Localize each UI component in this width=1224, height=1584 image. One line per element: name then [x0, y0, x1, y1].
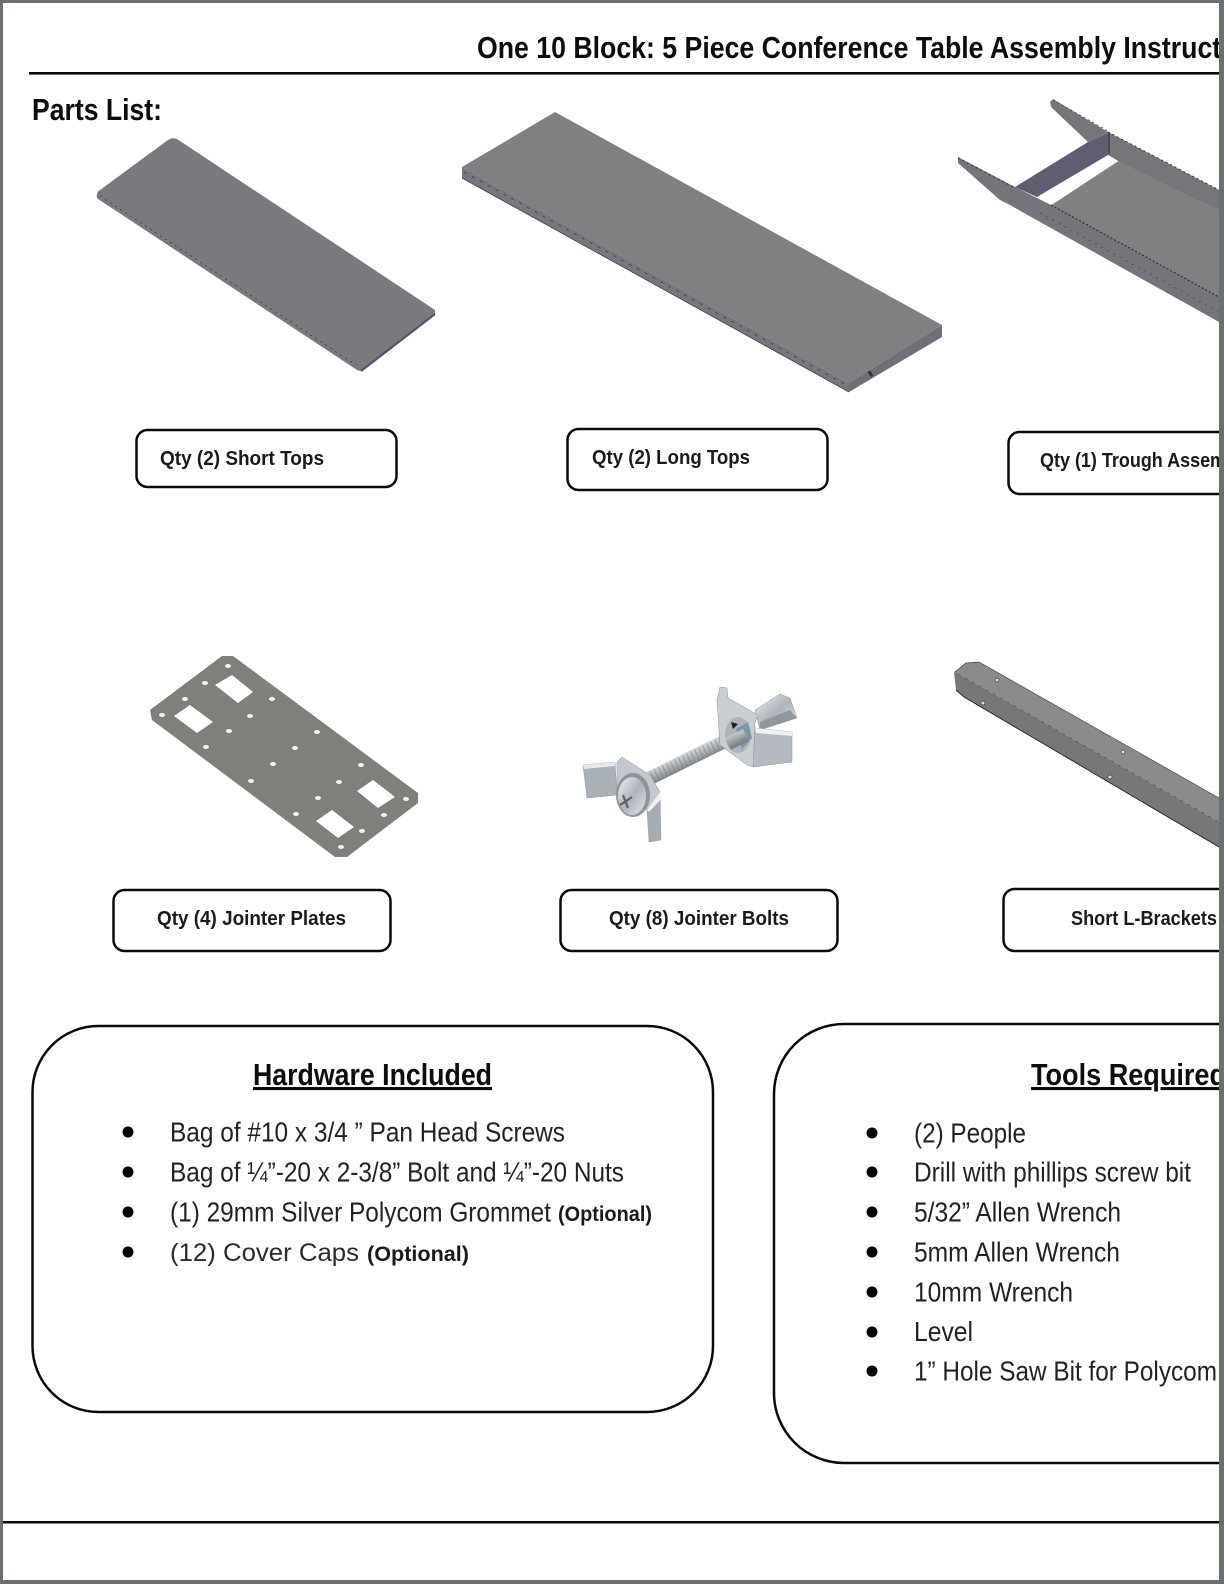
hardware list: (1) 29mm Silver Polycom Grommet: [170, 1196, 551, 1228]
label: short tops: Qty (2) Short Tops: [160, 448, 324, 470]
part: jointer bolt: [583, 687, 797, 842]
heading: hardware included: Hardware Included: [253, 1057, 492, 1092]
label: jointer bolts: [560, 890, 838, 951]
panel: hardware included: [32, 1026, 713, 1412]
tools list: 5/32” Allen Wrench: [914, 1196, 1121, 1228]
label: jointer bolts: Qty (8) Jointer Bolts: [609, 908, 789, 930]
tools list: Level: [914, 1316, 973, 1347]
label: jointer plates: Qty (4) Jointer Plates: [157, 908, 346, 930]
hardware list: Bag of ¼”-20 x 2-3/8” Bolt and ¼”-20 Nuts: [170, 1156, 624, 1188]
tools list: 10mm Wrench: [914, 1276, 1073, 1308]
hardware list: [122, 1116, 652, 1267]
part: jointer plate: [150, 656, 418, 857]
hardware list: (12) Cover Caps: [170, 1239, 359, 1267]
hardware list: Bag of #10 x 3/4 ” Pan Head Screws: [170, 1116, 565, 1148]
tools list: (2) People: [914, 1118, 1026, 1148]
hardware list: (Optional): [558, 1203, 652, 1226]
label: jointer plates: [114, 890, 390, 951]
hardware list: (Optional): [367, 1243, 469, 1266]
part: short top: [97, 138, 435, 371]
label: trough assembly: [1008, 432, 1224, 494]
footer rule: [3, 1521, 1220, 1524]
part: short L-bracket: [954, 662, 1219, 847]
part: trough assembly: [958, 99, 1219, 322]
tools list: 5mm Allen Wrench: [914, 1236, 1120, 1268]
heading: parts list: Parts List:: [32, 92, 162, 127]
label: short tops: [136, 430, 396, 487]
label: long tops: Qty (2) Long Tops: [592, 447, 750, 469]
label: long tops: [568, 429, 828, 490]
panel: tools required: [774, 1024, 1224, 1463]
tools list: [866, 1118, 1217, 1386]
label: short L-brackets: [1004, 889, 1224, 951]
part: long top: [462, 112, 942, 392]
tools list: Drill with phillips screw bit: [914, 1156, 1191, 1188]
